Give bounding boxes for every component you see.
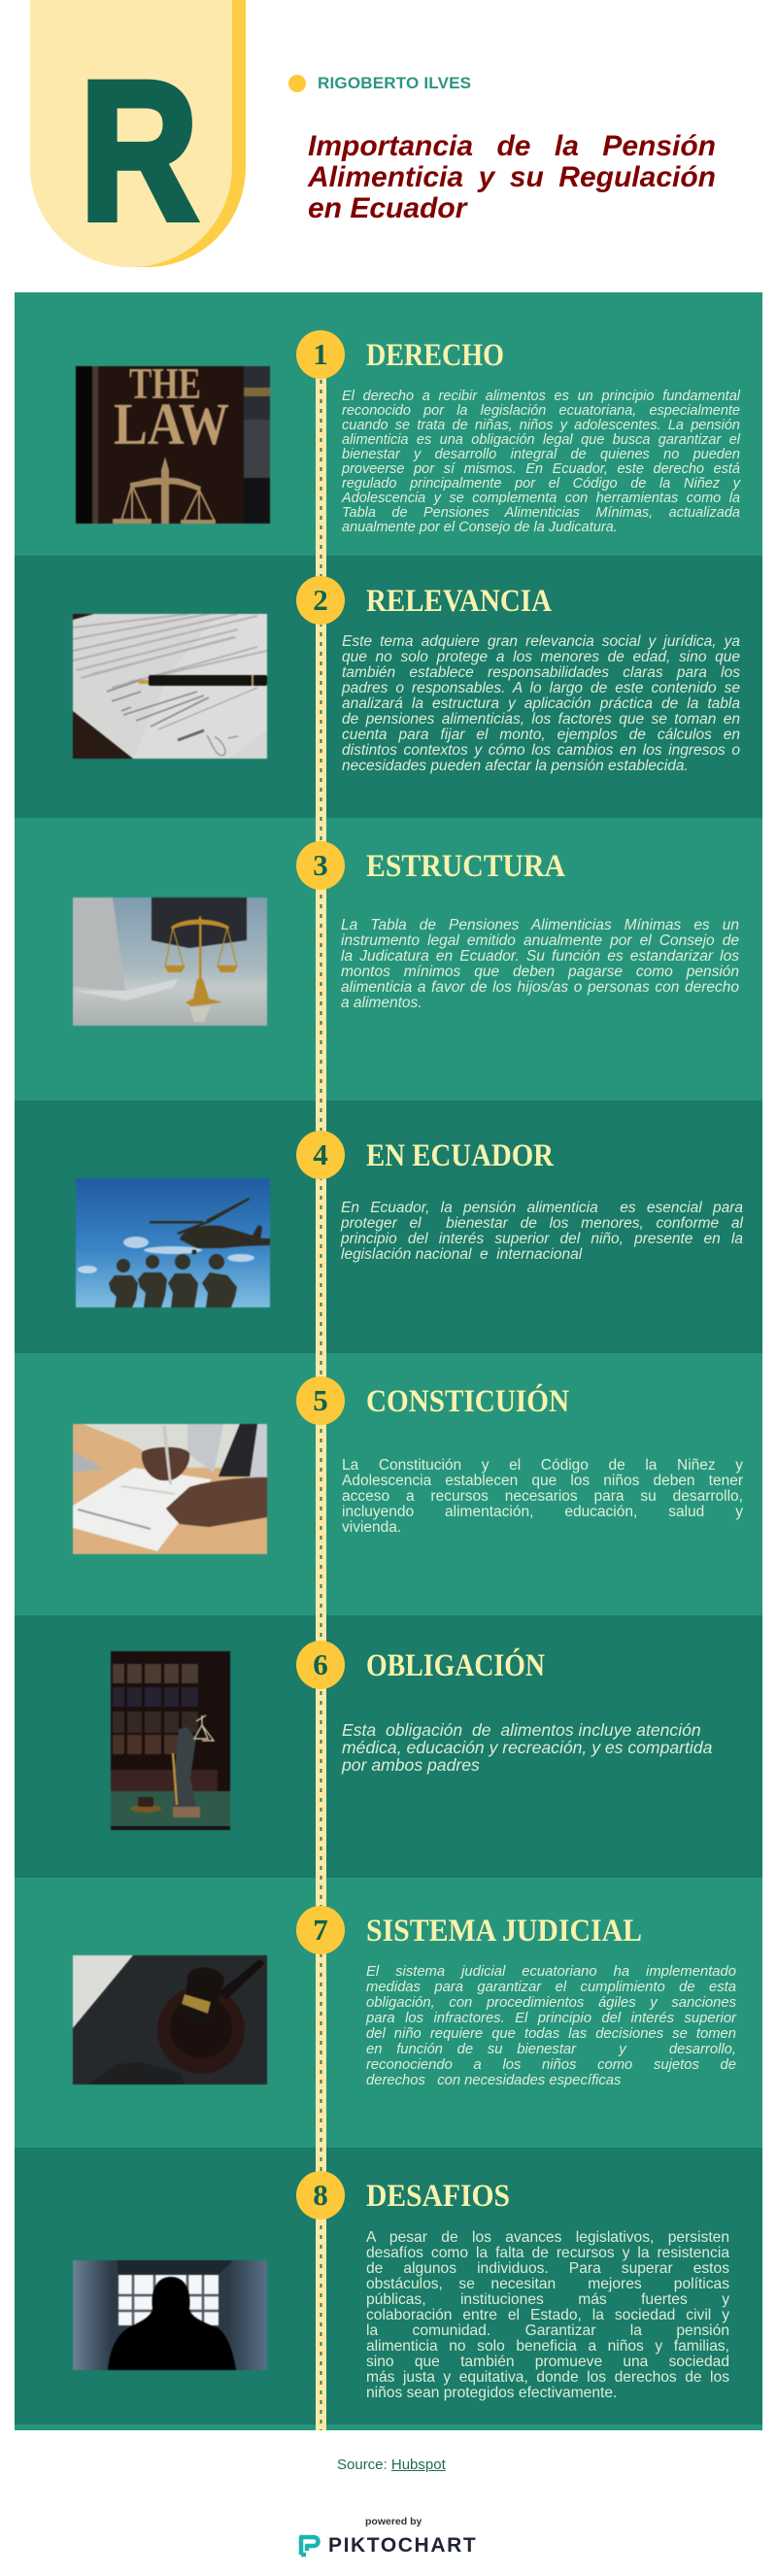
number 8 <box>296 2171 345 2220</box>
photo: the law book <box>75 365 271 525</box>
number 4 <box>296 1131 345 1179</box>
photo: signing a document <box>72 1423 268 1555</box>
number 2 <box>296 576 345 625</box>
photo: the law book: LAW <box>114 392 229 458</box>
text: sistema judicial: para los infractores. El principio del interés superior <box>366 2011 736 2026</box>
text: derecho: regulado principalmente por el Código de la Niñez y <box>342 476 740 491</box>
heading: relevancia: RELEVANCIA <box>366 584 552 619</box>
text: estructura: alimenticia a favor de los hijos/as o personas con derecho <box>341 979 739 996</box>
text: derecho: anualmente por el Consejo de la Judicatura. <box>342 520 618 535</box>
text: derecho: Adolescencia y se complementa con herramientas como la <box>342 491 740 506</box>
text: desafios: desafíos como la falta de recursos y la resistencia <box>366 2245 729 2261</box>
panel: section 5 constitucion <box>15 1353 762 1615</box>
source line: Source: Hubspot <box>337 2457 446 2473</box>
text: derecho <box>341 389 741 535</box>
text: desafios: más justa y equitativa, donde los derechos de los <box>366 2369 729 2386</box>
photo: soldiers and helicopter <box>75 1177 271 1308</box>
text: sistema judicial: El sistema judicial ecuatoriano ha implementado <box>366 1964 736 1980</box>
text: en ecuador: principio del interés superior del niño, presente en la <box>341 1231 743 1247</box>
text: desafios: A pesar de los avances legislativos, persisten <box>366 2229 729 2246</box>
number 5: 5 <box>313 1383 328 1417</box>
text: constitucion: La Constitución y el Código de la Niñez y <box>342 1457 743 1474</box>
text: relevancia: necesidades pueden afectar la pensión establecida. <box>342 758 689 774</box>
text: estructura: a alimentos. <box>341 995 422 1011</box>
text: constitucion: Adolescencia establecen que los niños deben tener <box>342 1473 743 1489</box>
number 7 <box>296 1906 345 1954</box>
number 6: 6 <box>313 1647 328 1681</box>
text: sistema judicial: derechos con necesidades específicas <box>366 2073 621 2088</box>
number 8: 8 <box>313 2178 328 2212</box>
text: desafios: la comunidad. Garantizar la pensión <box>366 2322 729 2339</box>
text: desafios: niños sean protegidos efectivamente. <box>366 2385 617 2401</box>
photo: silhouette at barred window <box>72 2259 268 2371</box>
number 4: 4 <box>313 1137 328 1171</box>
photo: gavel <box>72 1954 268 2085</box>
text: relevancia: cuenta para fijar el monto, ejemplos de cálculos en <box>342 727 740 743</box>
text: derecho: cuando se trata de niñas, niños y adolescentes. La pensión <box>342 418 740 433</box>
panel: section 1 derecho <box>15 292 762 556</box>
text: estructura <box>341 917 739 1011</box>
text: relevancia: de pensiones alimenticias, los factores que se toman en <box>342 711 740 728</box>
bottom strip <box>15 2424 762 2430</box>
text: derecho: bienestar y desarrollo integral de quienes no pueden <box>342 447 740 462</box>
text: en ecuador: legislación nacional e internacional <box>341 1246 582 1263</box>
text: derecho: El derecho a recibir alimentos es un principio fundamental <box>342 389 740 404</box>
title: en Ecuador <box>308 192 466 224</box>
panel: section 3 estructura <box>15 818 762 1101</box>
text: sistema judicial: reconociendo a los niños como sujetos de <box>366 2057 736 2073</box>
text: estructura: la Judicatura en Ecuador. Su función es estandarizar los <box>341 948 739 965</box>
text: constitucion: incluyendo alimentación, educación, salud y <box>342 1504 743 1520</box>
number 5 <box>296 1376 345 1425</box>
panel: section 7 sistema judicial <box>15 1878 762 2148</box>
text: constitucion: acceso a recursos necesarios para su desarrollo, <box>342 1488 743 1505</box>
heading: estructura: ESTRUCTURA <box>366 849 565 884</box>
text: desafios: de algunos individuos. Para superar estos <box>366 2260 729 2277</box>
panel: section 2 relevancia <box>15 556 762 818</box>
text: obligacion <box>342 1720 712 1775</box>
header badge with letter R <box>30 0 246 267</box>
heading: en ecuador: EN ECUADOR <box>366 1138 555 1173</box>
heading: obligacion: OBLIGACIÓN <box>366 1646 545 1683</box>
text: sistema judicial <box>365 1964 736 2088</box>
powered by: powered by <box>365 2516 422 2527</box>
text: derecho: alimenticia es una obligación legal que busca garantizar el <box>342 432 740 448</box>
text: obligacion: Esta obligación de alimentos incluye atención <box>342 1720 701 1740</box>
title: Importancia de la Pensión <box>308 130 716 162</box>
text: derecho: proveerse por sí mismos. En Ecuador, este derecho está <box>342 461 740 477</box>
text: relevancia: analizará la estructura y aplicación práctica de la tabla <box>342 695 740 712</box>
title <box>307 130 716 224</box>
text: estructura: instrumento legal emitido anualmente por el Consejo de <box>341 932 739 949</box>
number 6 <box>296 1641 345 1689</box>
text: en ecuador <box>340 1200 744 1263</box>
text: relevancia: Este tema adquiere gran relevancia social y jurídica, ya <box>342 633 740 650</box>
photo: lady justice and books <box>110 1650 231 1831</box>
author name: RIGOBERTO ILVES <box>318 74 471 92</box>
header badge with letter R: R <box>80 40 198 261</box>
text: relevancia <box>342 633 740 774</box>
number 3: 3 <box>313 848 328 882</box>
text: sistema judicial: medidas para garantizar el cumplimiento de esta <box>366 1980 736 1995</box>
text: constitucion: vivienda. <box>342 1519 401 1536</box>
text: desafios: sino que también promueve una sociedad <box>366 2354 729 2370</box>
number 1 <box>296 330 345 379</box>
heading: derecho: DERECHO <box>366 338 504 373</box>
piktochart wordmark: PIKTOCHART <box>328 2534 477 2557</box>
text: constitucion <box>342 1457 743 1536</box>
number 1: 1 <box>313 337 328 371</box>
panel: section 4 en ecuador <box>15 1101 762 1353</box>
text: desafios <box>366 2229 730 2401</box>
text: obligacion: por ambos padres <box>342 1755 480 1775</box>
number 2: 2 <box>313 583 328 617</box>
text: relevancia: distintos contextos y cómo los cambios en los ingresos o <box>342 742 740 759</box>
text: en ecuador: proteger el bienestar de los menores, conforme al <box>341 1215 743 1232</box>
text: relevancia: que no solo protege a los menores de edad, sino que <box>342 649 740 665</box>
author dot <box>288 75 306 92</box>
text: derecho: reconocido por la legislación ecuatoriana, especialmente <box>342 403 740 419</box>
photo: golden scales <box>72 897 268 1027</box>
text: estructura: montos mínimos que deben pagarse como pensión <box>341 964 739 980</box>
photo: contract and pen <box>72 613 268 760</box>
panel: section 8 desafios <box>15 2148 762 2424</box>
text: relevancia: padres o responsables. A lo largo de este contenido se <box>342 680 740 696</box>
text: sistema judicial: del niño requiere que todas las decisiones se tomen <box>366 2026 736 2042</box>
timeline dashed line <box>315 355 326 2430</box>
number 7: 7 <box>313 1913 328 1947</box>
text: en ecuador: En Ecuador, la pensión alimenticia es esencial para <box>341 1200 743 1216</box>
text: relevancia: también establece responsabilidades claras para los <box>342 664 740 681</box>
text: obligacion: médica, educación y recreación, y es compartida <box>342 1738 712 1757</box>
text: desafios: alimenticia no solo beneficia a niños y familias, <box>366 2338 729 2355</box>
heading: sistema judicial: SISTEMA JUDICIAL <box>366 1914 642 1949</box>
text: sistema judicial: en función de su bienestar y desarrollo, <box>366 2042 736 2057</box>
text: estructura: La Tabla de Pensiones Alimenticias Mínimas es un <box>341 917 739 933</box>
piktochart logo icon <box>299 2535 321 2557</box>
number 3 <box>296 841 345 890</box>
title: Alimenticia y su Regulación <box>308 161 716 193</box>
panel: section 6 obligacion <box>15 1615 762 1878</box>
heading: constitucion: CONSTICUIÓN <box>366 1382 569 1419</box>
text: desafios: obstáculos, se necesitan mejores políticas <box>366 2276 729 2292</box>
text: desafios: públicas, instituciones más fuertes y <box>366 2291 729 2308</box>
text: desafios: colaboración entre el Estado, la sociedad civil y <box>366 2307 729 2323</box>
text: sistema judicial: obligación, con procedimientos ágiles y sanciones <box>366 1995 736 2011</box>
heading: desafios: DESAFIOS <box>366 2179 510 2214</box>
text: derecho: Tabla de Pensiones Alimenticias Mínimas, actualizada <box>342 505 740 521</box>
